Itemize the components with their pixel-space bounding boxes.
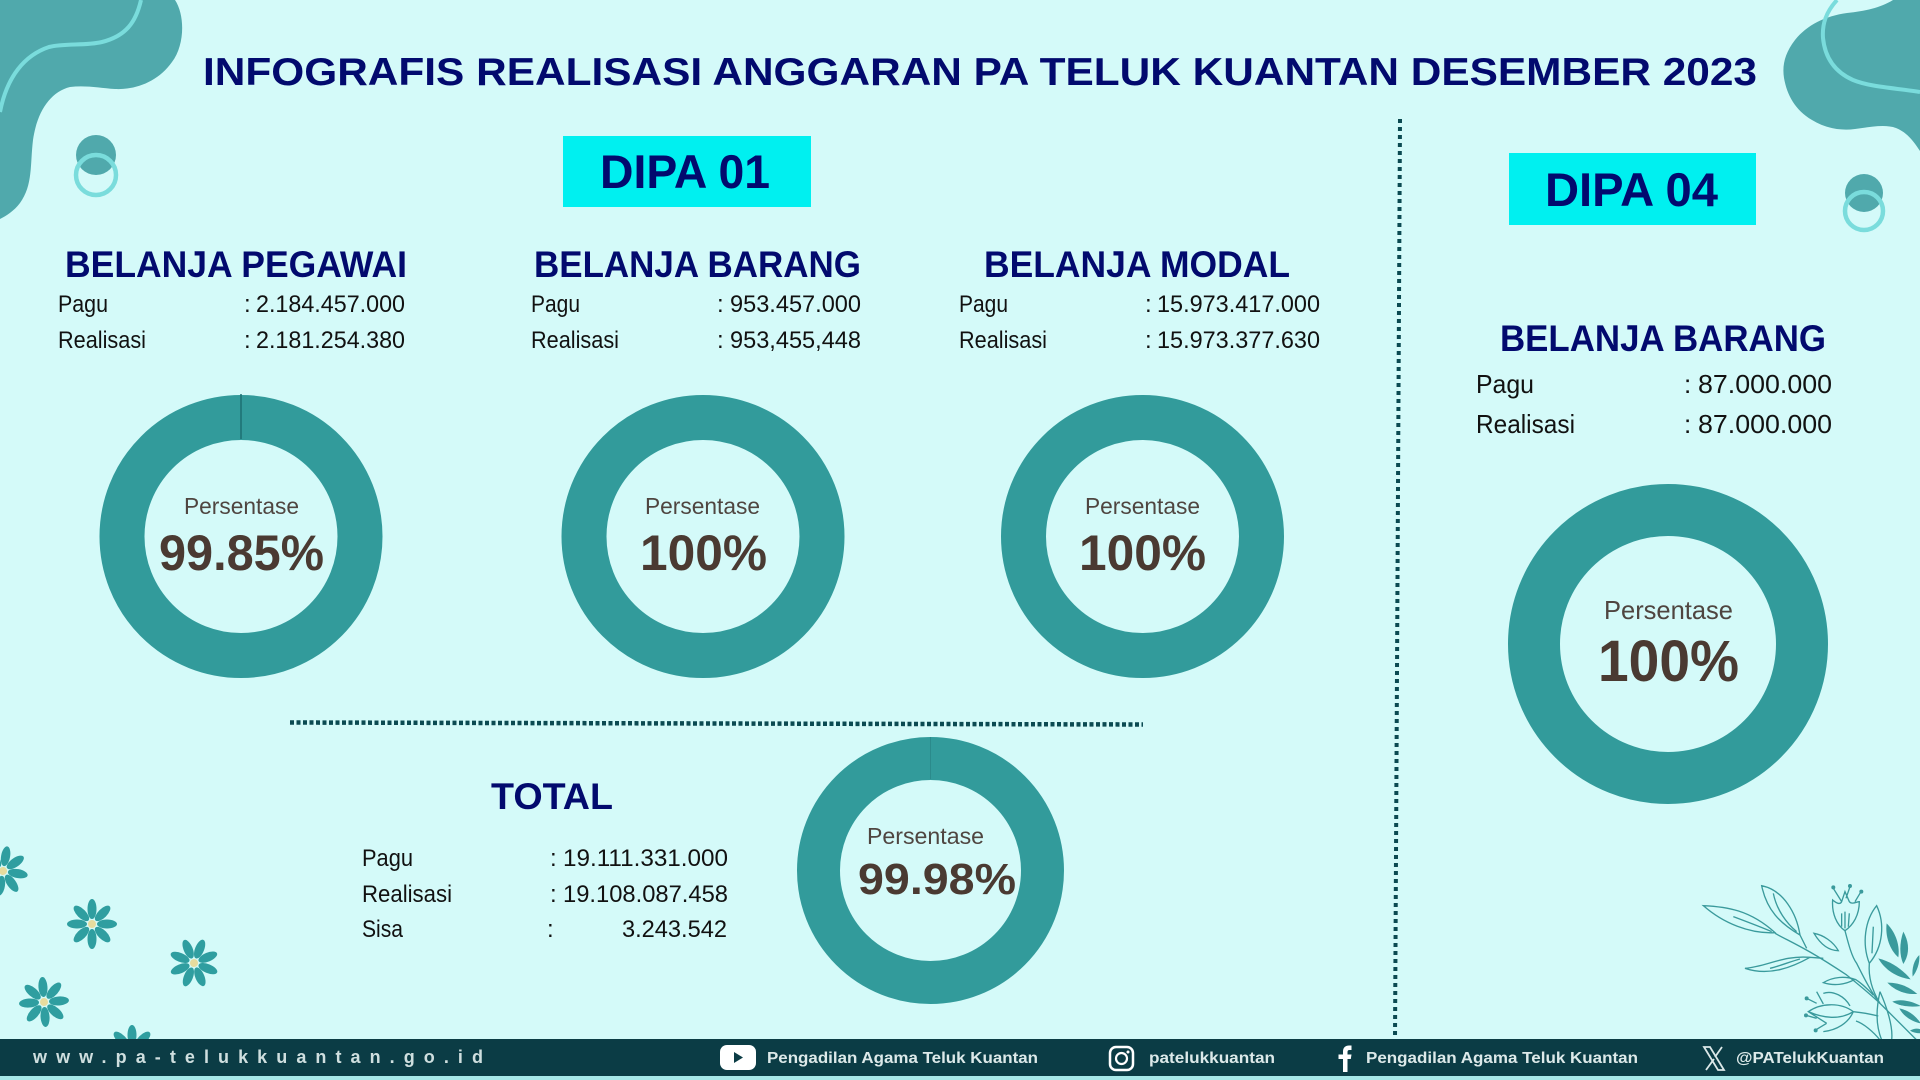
figures: belanja modal: Realisasi — [959, 327, 1047, 354]
footer: youtube — [720, 1045, 1038, 1070]
figures: belanja modal: 15.973.417.000 — [1157, 291, 1320, 318]
badge: DIPA 04 — [1509, 153, 1756, 225]
flower 5 — [111, 1025, 153, 1050]
figures: total: 19.108.087.458 — [563, 881, 728, 908]
figures: belanja barang dipa 04: 87.000.000 — [1698, 369, 1832, 399]
footer: x — [1704, 1047, 1884, 1070]
figures: belanja pegawai: : — [244, 291, 251, 318]
flowers: bottom left — [0, 842, 227, 1050]
figures: total: Realisasi — [362, 881, 452, 908]
donut chart: belanja modal 100%: 100% — [1079, 525, 1206, 581]
badge: DIPA 04: DIPA 04 — [1545, 163, 1718, 216]
figures: belanja barang dipa 04: Pagu — [1476, 369, 1534, 399]
flower 2 — [67, 899, 117, 949]
figures: belanja barang dipa 04 — [1476, 369, 1832, 439]
heading: belanja modal: BELANJA MODAL — [984, 244, 1290, 285]
footer: facebook: Pengadilan Agama Teluk Kuantan — [1366, 1050, 1638, 1067]
decorative blob: top left — [0, 0, 182, 219]
figures: total: 3.243.542 — [622, 916, 727, 943]
donut chart: belanja barang 100% — [584, 418, 822, 656]
footer: facebook — [1338, 1046, 1638, 1072]
flower 4 — [17, 975, 71, 1029]
figures: belanja barang — [531, 291, 861, 354]
figures: total: Sisa — [362, 916, 404, 943]
figures: belanja pegawai: : — [244, 327, 251, 354]
vertical dotted divider — [1395, 119, 1400, 1039]
figures: belanja barang dipa 04: : — [1684, 369, 1691, 399]
footer: youtube: Pengadilan Agama Teluk Kuantan — [767, 1050, 1038, 1067]
decorative circles: left — [76, 135, 116, 195]
figures: total: : — [550, 881, 557, 908]
figures: belanja modal: : — [1145, 291, 1152, 318]
decorative circles: right — [1845, 174, 1883, 230]
heading: belanja pegawai: BELANJA PEGAWAI — [65, 244, 407, 285]
donut chart: belanja pegawai 99.85%: Persentase — [184, 493, 299, 519]
figures: belanja barang: : — [717, 327, 724, 354]
figures: total: Pagu — [362, 845, 413, 872]
figures: belanja barang: : — [717, 291, 724, 318]
footer bar — [0, 1039, 1920, 1080]
figures: belanja barang: Pagu — [531, 291, 580, 318]
heading: belanja barang dipa 04: BELANJA BARANG — [1500, 318, 1826, 359]
donut chart: total 99.98%: Persentase — [867, 823, 984, 849]
figures: belanja modal: Pagu — [959, 291, 1008, 318]
figures: total: : — [550, 845, 557, 872]
flower 1 — [0, 842, 32, 900]
figures: belanja pegawai: Realisasi — [58, 327, 146, 354]
horizontal dotted divider — [290, 722, 1143, 724]
panel: belanja pegawai — [58, 244, 407, 656]
badge: DIPA 01 — [563, 136, 811, 207]
footer: instagram: patelukkuantan — [1149, 1050, 1275, 1067]
figures: belanja barang: 953.457.000 — [730, 291, 861, 318]
botanical illustration: bottom right — [1703, 884, 1920, 1040]
donut chart: belanja pegawai 99.85%: 99.85% — [159, 525, 324, 581]
donut chart: total 99.98%: 99.98% — [858, 855, 1016, 904]
figures: belanja pegawai: Pagu — [58, 291, 108, 318]
figures: belanja pegawai — [58, 291, 405, 354]
donut chart: belanja pegawai 99.85% — [122, 394, 360, 656]
heading: belanja barang: BELANJA BARANG — [534, 244, 861, 285]
donut chart: total 99.98% — [818, 737, 1042, 982]
figures: belanja pegawai: 2.181.254.380 — [256, 327, 405, 354]
figures: belanja modal: : — [1145, 327, 1152, 354]
title: INFOGRAFIS REALISASI ANGGARAN PA TELUK KUANTAN DESEMBER 2023 — [203, 51, 1757, 94]
figures: belanja modal: 15.973.377.630 — [1157, 327, 1320, 354]
donut chart: belanja barang 100%: Persentase — [645, 493, 760, 519]
donut chart: belanja barang 100%: 100% — [640, 525, 767, 581]
figures: total: 19.111.331.000 — [563, 845, 728, 872]
panel: belanja barang dipa 04 — [1476, 318, 1832, 778]
donut chart: belanja modal 100%: Persentase — [1085, 493, 1200, 519]
figures: belanja barang: Realisasi — [531, 327, 619, 354]
figures: belanja barang dipa 04: 87.000.000 — [1698, 409, 1832, 439]
figures: belanja barang: 953,455,448 — [730, 327, 861, 354]
donut chart: belanja barang dipa 04 100% — [1534, 510, 1802, 778]
donut chart: belanja modal 100% — [1024, 418, 1262, 656]
panel: total — [362, 737, 1042, 982]
panel: belanja barang dipa 01 — [531, 244, 861, 656]
figures: total: : — [547, 916, 554, 943]
decorative blob: top right — [1783, 0, 1920, 151]
donut chart: belanja barang dipa 04 100%: Persentase — [1604, 595, 1733, 625]
figures: belanja barang dipa 04: : — [1684, 409, 1691, 439]
figures: belanja modal — [959, 291, 1320, 354]
panel: belanja modal — [959, 244, 1320, 656]
flower 3 — [161, 930, 227, 996]
footer: instagram — [1110, 1047, 1275, 1070]
figures: belanja pegawai: 2.184.457.000 — [256, 291, 405, 318]
footer: x: @PATelukKuantan — [1736, 1050, 1884, 1067]
badge: DIPA 01: DIPA 01 — [600, 145, 770, 198]
donut chart: belanja barang dipa 04 100%: 100% — [1598, 629, 1739, 694]
heading: total: TOTAL — [491, 776, 613, 817]
figures: total — [362, 845, 728, 943]
footer: website: www.pa-telukkuantan.go.id — [32, 1047, 483, 1067]
figures: belanja barang dipa 04: Realisasi — [1476, 409, 1575, 439]
